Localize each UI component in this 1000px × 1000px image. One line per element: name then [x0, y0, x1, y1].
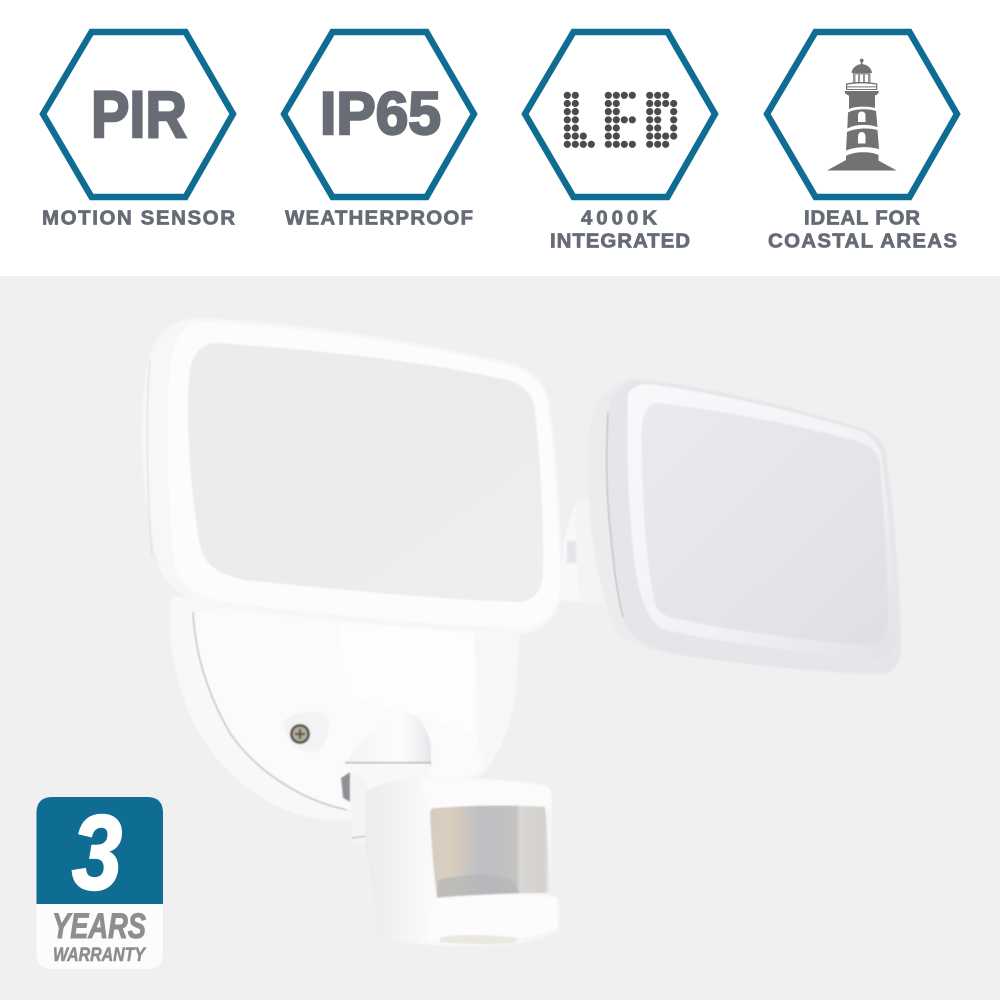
badge: years panel	[36, 797, 163, 904]
arm connecting the two heads	[558, 500, 612, 605]
product photo: twin-head motion sensor flood light	[142, 318, 902, 946]
label: 4000K integrated: 4000K	[581, 206, 657, 230]
motion sensor housing	[365, 778, 559, 946]
hexagon: LED	[525, 32, 715, 197]
left lamp head	[142, 318, 562, 634]
label: 4000K integrated: INTEGRATED	[550, 230, 690, 252]
left lamp lens	[188, 343, 543, 602]
PIR sensor lens	[430, 806, 550, 898]
badge number 3: 3	[72, 794, 122, 912]
icon: lighthouse	[827, 59, 897, 170]
heading: PIR: PIR	[91, 77, 187, 151]
label: motion sensor: MOTION SENSOR	[42, 206, 235, 230]
feature: PIR motion sensor	[42, 32, 235, 230]
sensor swivel stem	[341, 713, 431, 846]
badge text: warranty: WARRANTY	[53, 944, 147, 966]
mounting screw	[283, 712, 329, 752]
heading: IP65: IP65	[320, 80, 441, 147]
product background panel	[0, 276, 1000, 1000]
badge: warranty panel	[36, 904, 163, 969]
label: ideal for coastal areas: COASTAL AREAS	[768, 230, 957, 252]
right lamp lens	[642, 403, 888, 645]
feature: ideal for coastal areas	[767, 32, 957, 252]
right lamp head	[588, 378, 902, 675]
hexagon: coastal	[767, 32, 957, 197]
label: ideal for coastal areas: IDEAL FOR	[804, 206, 920, 230]
wall mount base plate	[170, 596, 520, 821]
top white band	[0, 0, 1000, 276]
icon: LED dot matrix letters	[564, 92, 677, 148]
badge text: years: YEARS	[52, 907, 146, 946]
label: weatherproof: WEATHERPROOF	[285, 206, 473, 230]
label: ideal for coastal areas	[768, 206, 957, 252]
hexagon: IP65	[284, 32, 474, 197]
label: 4000K integrated	[550, 206, 690, 252]
feature: IP65 weatherproof	[284, 32, 474, 230]
hexagon: PIR	[43, 32, 233, 197]
warranty badge	[36, 794, 163, 969]
feature: 4000K integrated LED	[525, 32, 715, 252]
sensor bottom controls	[440, 935, 518, 944]
